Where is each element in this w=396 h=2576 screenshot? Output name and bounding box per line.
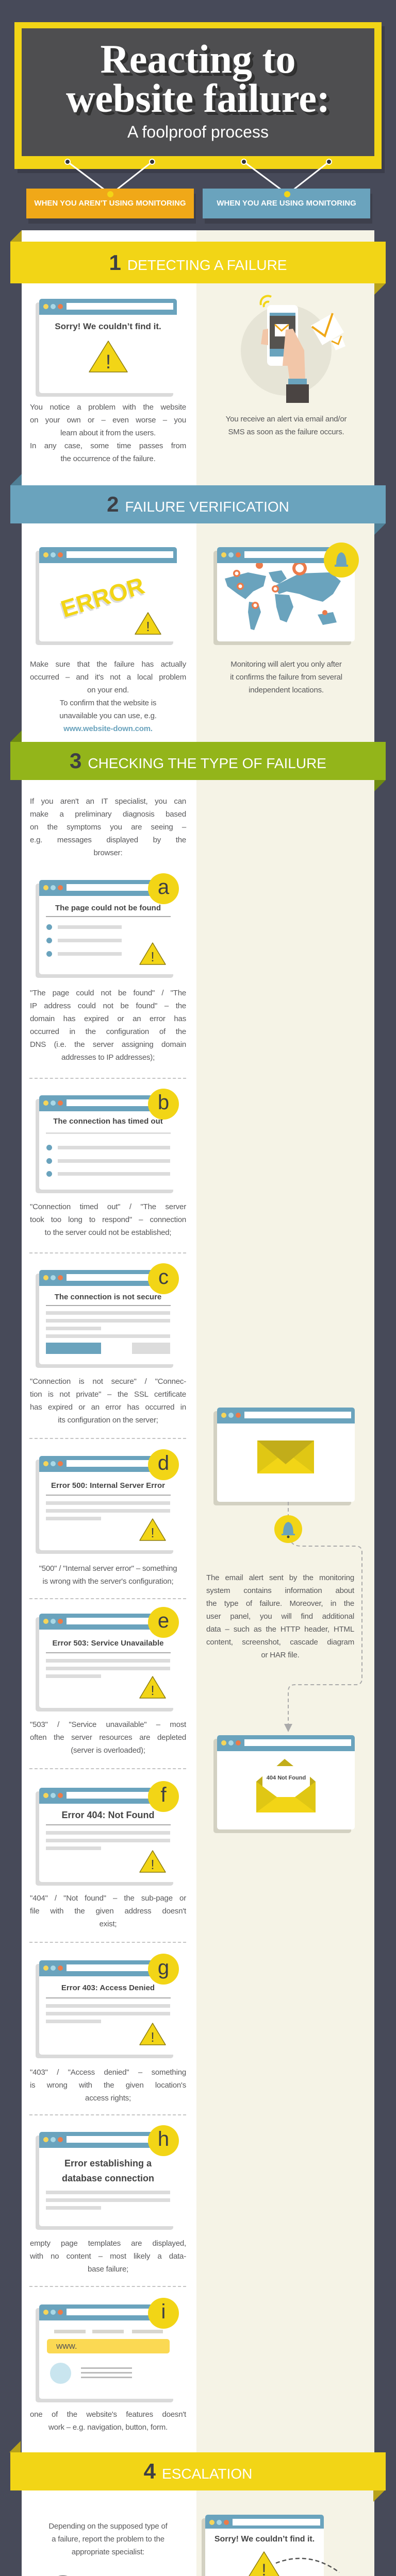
person: server admin <box>59 2575 67 2576</box>
badge g <box>148 1954 179 1985</box>
text: monitoring failure type: system contains information about <box>206 1586 354 1595</box>
case d browser: ! <box>151 1525 155 1540</box>
text b <box>30 1202 186 1237</box>
text a <box>30 989 186 1062</box>
text h <box>30 2239 186 2274</box>
text e: often the server resources are depleted <box>30 1733 186 1742</box>
strings connecting frame to buttons <box>64 159 332 189</box>
text: verify without monitoring: on your end. <box>87 686 129 694</box>
text h: base failure; <box>88 2265 128 2274</box>
case h browser: database connection <box>62 2173 154 2183</box>
text g: is wrong with the given location's <box>30 2081 186 2090</box>
text d <box>39 1564 177 1586</box>
text: intro: make a preliminary diagnosis based <box>30 810 186 819</box>
text: monitoring failure type: or HAR file. <box>261 1651 300 1659</box>
text: detect with monitoring <box>226 415 346 436</box>
browser: sorry: Sorry! We couldn’t find it. <box>55 321 161 331</box>
text b: took too long to respond" – connection <box>30 1215 186 1224</box>
case d browser <box>39 1456 177 1550</box>
section 1 banner <box>10 242 386 283</box>
button: using monitoring <box>203 189 370 218</box>
text a: domain has expired or an error has <box>30 1014 186 1023</box>
case e browser: ! <box>151 1683 155 1698</box>
icon: bell badge <box>324 543 359 578</box>
text: detect without monitoring <box>30 403 186 463</box>
text g <box>30 2068 186 2103</box>
text: detect without monitoring: In any case, some time passes from <box>30 442 186 450</box>
text g: "403" / "Access denied" – something <box>30 2068 186 2077</box>
section 3 banner <box>10 742 386 780</box>
button: not using monitoring: WHEN YOU AREN'T USING MONITORING <box>34 199 186 208</box>
text a: DNS (i.e. the server assigning domain <box>30 1040 186 1049</box>
section 2 banner: 2 FAILURE VERIFICATION <box>107 492 289 516</box>
text: verify without monitoring: To confirm that the website is <box>60 699 156 707</box>
text f: file with the given address doesn't <box>30 1907 186 1916</box>
text d: "500" / "Internal server error" – something <box>39 1564 177 1573</box>
browser: world map <box>217 547 355 641</box>
case d browser: Error 500: Internal Server Error <box>51 1481 165 1490</box>
text: verify with monitoring: Monitoring will alert you only after <box>230 660 342 669</box>
button: not using monitoring <box>26 189 194 218</box>
browser: escalation alert: Sorry! We couldn’t find it. <box>214 2535 315 2544</box>
browser: open envelope 404 <box>217 1735 355 1829</box>
badge i <box>148 2298 179 2329</box>
yellow knots <box>107 191 290 197</box>
case f browser <box>39 1788 177 1882</box>
text: detect without monitoring: on your own or – even worse – you <box>30 416 186 425</box>
case b browser: The connection has timed out <box>53 1117 163 1126</box>
browser: open envelope 404: 404 Not Found <box>267 1775 306 1781</box>
text: escalation: Depending on the supposed type of <box>48 2522 168 2531</box>
badge a <box>148 873 179 904</box>
text b: to the server could not be established; <box>45 1228 171 1237</box>
text c <box>30 1377 186 1425</box>
badge g: g <box>158 1956 169 1979</box>
text: intro: If you aren't an IT specialist, you can <box>30 797 186 806</box>
badge i: i <box>161 2300 166 2323</box>
text: intro: on the symptoms you are seeing – <box>30 823 186 832</box>
section 2 banner <box>10 485 386 523</box>
text d: is wrong with the server's configuration; <box>43 1577 173 1586</box>
case a browser <box>39 880 177 974</box>
text: verify with monitoring <box>230 660 342 694</box>
badge c <box>148 1263 179 1294</box>
section 3 banner: 3 CHECKING THE TYPE OF FAILURE <box>70 749 326 773</box>
browser: escalation alert <box>205 2515 324 2576</box>
browser: email received <box>217 1408 355 1502</box>
case g browser <box>39 1960 177 2055</box>
text: escalation <box>48 2522 168 2556</box>
case a browser: ! <box>151 949 155 964</box>
text: verify without monitoring: unavailable you can use, e.g. <box>59 711 157 720</box>
icon: warning small: ! <box>146 619 150 634</box>
browser: error <box>39 547 177 641</box>
badge b <box>148 1089 179 1120</box>
badge e <box>148 1607 179 1638</box>
text: verify without monitoring: occurred – and it's not a local problem <box>30 673 186 682</box>
text e <box>30 1720 187 1755</box>
text e: "503" / "Service unavailable" – most <box>30 1720 186 1729</box>
text: verify with monitoring: independent locations. <box>249 686 324 694</box>
badge c: c <box>158 1266 169 1289</box>
case e browser <box>39 1614 177 1708</box>
text: intro <box>30 797 187 857</box>
case h browser <box>39 2132 177 2226</box>
text: verify without monitoring <box>30 660 187 733</box>
badge e: e <box>158 1609 169 1632</box>
case c browser: The connection is not secure <box>55 1293 161 1301</box>
badge d: d <box>158 1452 169 1475</box>
section 4 banner: 4 ESCALATION <box>144 2459 252 2483</box>
badge d <box>148 1449 179 1480</box>
badge f <box>148 1781 179 1812</box>
case h browser: Error establishing a <box>64 2158 152 2168</box>
title text: Reacting to <box>100 37 296 81</box>
text a: occurred in the configuration of the <box>30 1027 186 1036</box>
case g browser: Error 403: Access Denied <box>61 1984 155 1992</box>
badge b: b <box>158 1091 169 1114</box>
text i <box>30 2410 187 2432</box>
subtitle: A foolproof process <box>127 123 269 141</box>
badge h <box>148 2125 179 2156</box>
icon: warning: ! <box>106 351 111 373</box>
text: intro: e.g. messages displayed by the <box>30 836 186 844</box>
text b: "Connection timed out" / "The server <box>30 1202 186 1211</box>
button: using monitoring: WHEN YOU ARE USING MONITORING <box>217 199 356 208</box>
case f browser: ! <box>151 1857 155 1872</box>
icon: warning small <box>135 612 161 635</box>
text: monitoring failure type: The email alert sent by the monitoring <box>206 1573 354 1582</box>
text g: access rights; <box>85 2094 131 2103</box>
text i: work – e.g. navigation, button, form. <box>48 2423 168 2432</box>
text: monitoring failure type: user panel, you will find additional <box>206 1612 354 1621</box>
section 1 banner: 1 DETECTING A FAILURE <box>109 250 287 275</box>
text c: has expired or an error has occurred in <box>30 1403 186 1412</box>
text: detect without monitoring: the occurrence of the failure. <box>60 454 156 463</box>
text: monitoring failure type: data – such as the HTTP header, HTML <box>206 1625 354 1634</box>
text h: empty page templates are displayed, <box>30 2239 186 2248</box>
text a: "The page could not be found" / "The <box>30 989 186 997</box>
text e: (server is overloaded); <box>71 1746 145 1755</box>
text: verify without monitoring: www.website-down.com. <box>63 724 153 733</box>
text f: "404" / "Not found" – the sub-page or <box>30 1894 186 1903</box>
case g browser: ! <box>151 2029 155 2045</box>
text c: "Connection is not secure" / "Connec- <box>30 1377 186 1386</box>
icon: warning <box>89 341 128 373</box>
title inner board <box>22 28 374 156</box>
case i browser <box>39 2304 177 2399</box>
text: detect with monitoring: You receive an alert via email and/or <box>226 415 346 423</box>
text: escalation: a failure, report the problem to the <box>52 2535 164 2544</box>
text: detect without monitoring: You notice a problem with the website <box>30 403 186 412</box>
text: verify without monitoring: Make sure that the failure has actually <box>30 660 186 669</box>
text a: IP address could not be found" – the <box>30 1002 186 1010</box>
section 4 banner <box>10 2452 386 2490</box>
illustration: phone alert <box>241 295 345 403</box>
text: escalation: appropriate specialist: <box>72 2548 144 2556</box>
dashed flow with bell <box>274 1502 362 1732</box>
title frame <box>14 22 382 169</box>
text: intro: browser: <box>94 849 122 857</box>
case e browser: Error 503: Service Unavailable <box>53 1639 163 1648</box>
browser: sorry <box>39 299 177 393</box>
case f browser: Error 404: Not Found <box>61 1810 155 1820</box>
text: verify with monitoring: it confirms the failure from several <box>230 673 342 682</box>
text: detect with monitoring: SMS as soon as the failure occurs. <box>228 428 344 436</box>
case c browser <box>39 1270 177 1364</box>
text a: addresses to IP addresses); <box>61 1053 155 1062</box>
text: monitoring failure type: content, screenshot, cascade diagram <box>206 1638 354 1647</box>
text: monitoring failure type <box>206 1573 355 1659</box>
text: detect without monitoring: learn about it from the users. <box>60 429 156 437</box>
text i: one of the website's features doesn't <box>30 2410 186 2419</box>
text c: tion is not private" – the SSL certificate <box>30 1390 186 1399</box>
case a browser: The page could not be found <box>55 904 161 912</box>
text h: with no content – most likely a data- <box>30 2252 186 2261</box>
text f: exist; <box>100 1920 117 1928</box>
badge h: h <box>158 2128 169 2150</box>
title text: website failure: <box>66 76 330 121</box>
text f <box>30 1894 187 1928</box>
case i browser: www. <box>56 2341 77 2351</box>
text: monitoring failure type: the type of failure. Moreover, in the <box>206 1599 354 1608</box>
badge a: a <box>158 876 169 899</box>
case b browser <box>39 1095 177 1190</box>
bell with dashed link <box>275 2557 340 2573</box>
badge f: f <box>160 1784 167 1806</box>
error word: ERROR <box>58 572 147 622</box>
title text <box>66 37 330 121</box>
text c: its configuration on the server; <box>58 1416 158 1425</box>
